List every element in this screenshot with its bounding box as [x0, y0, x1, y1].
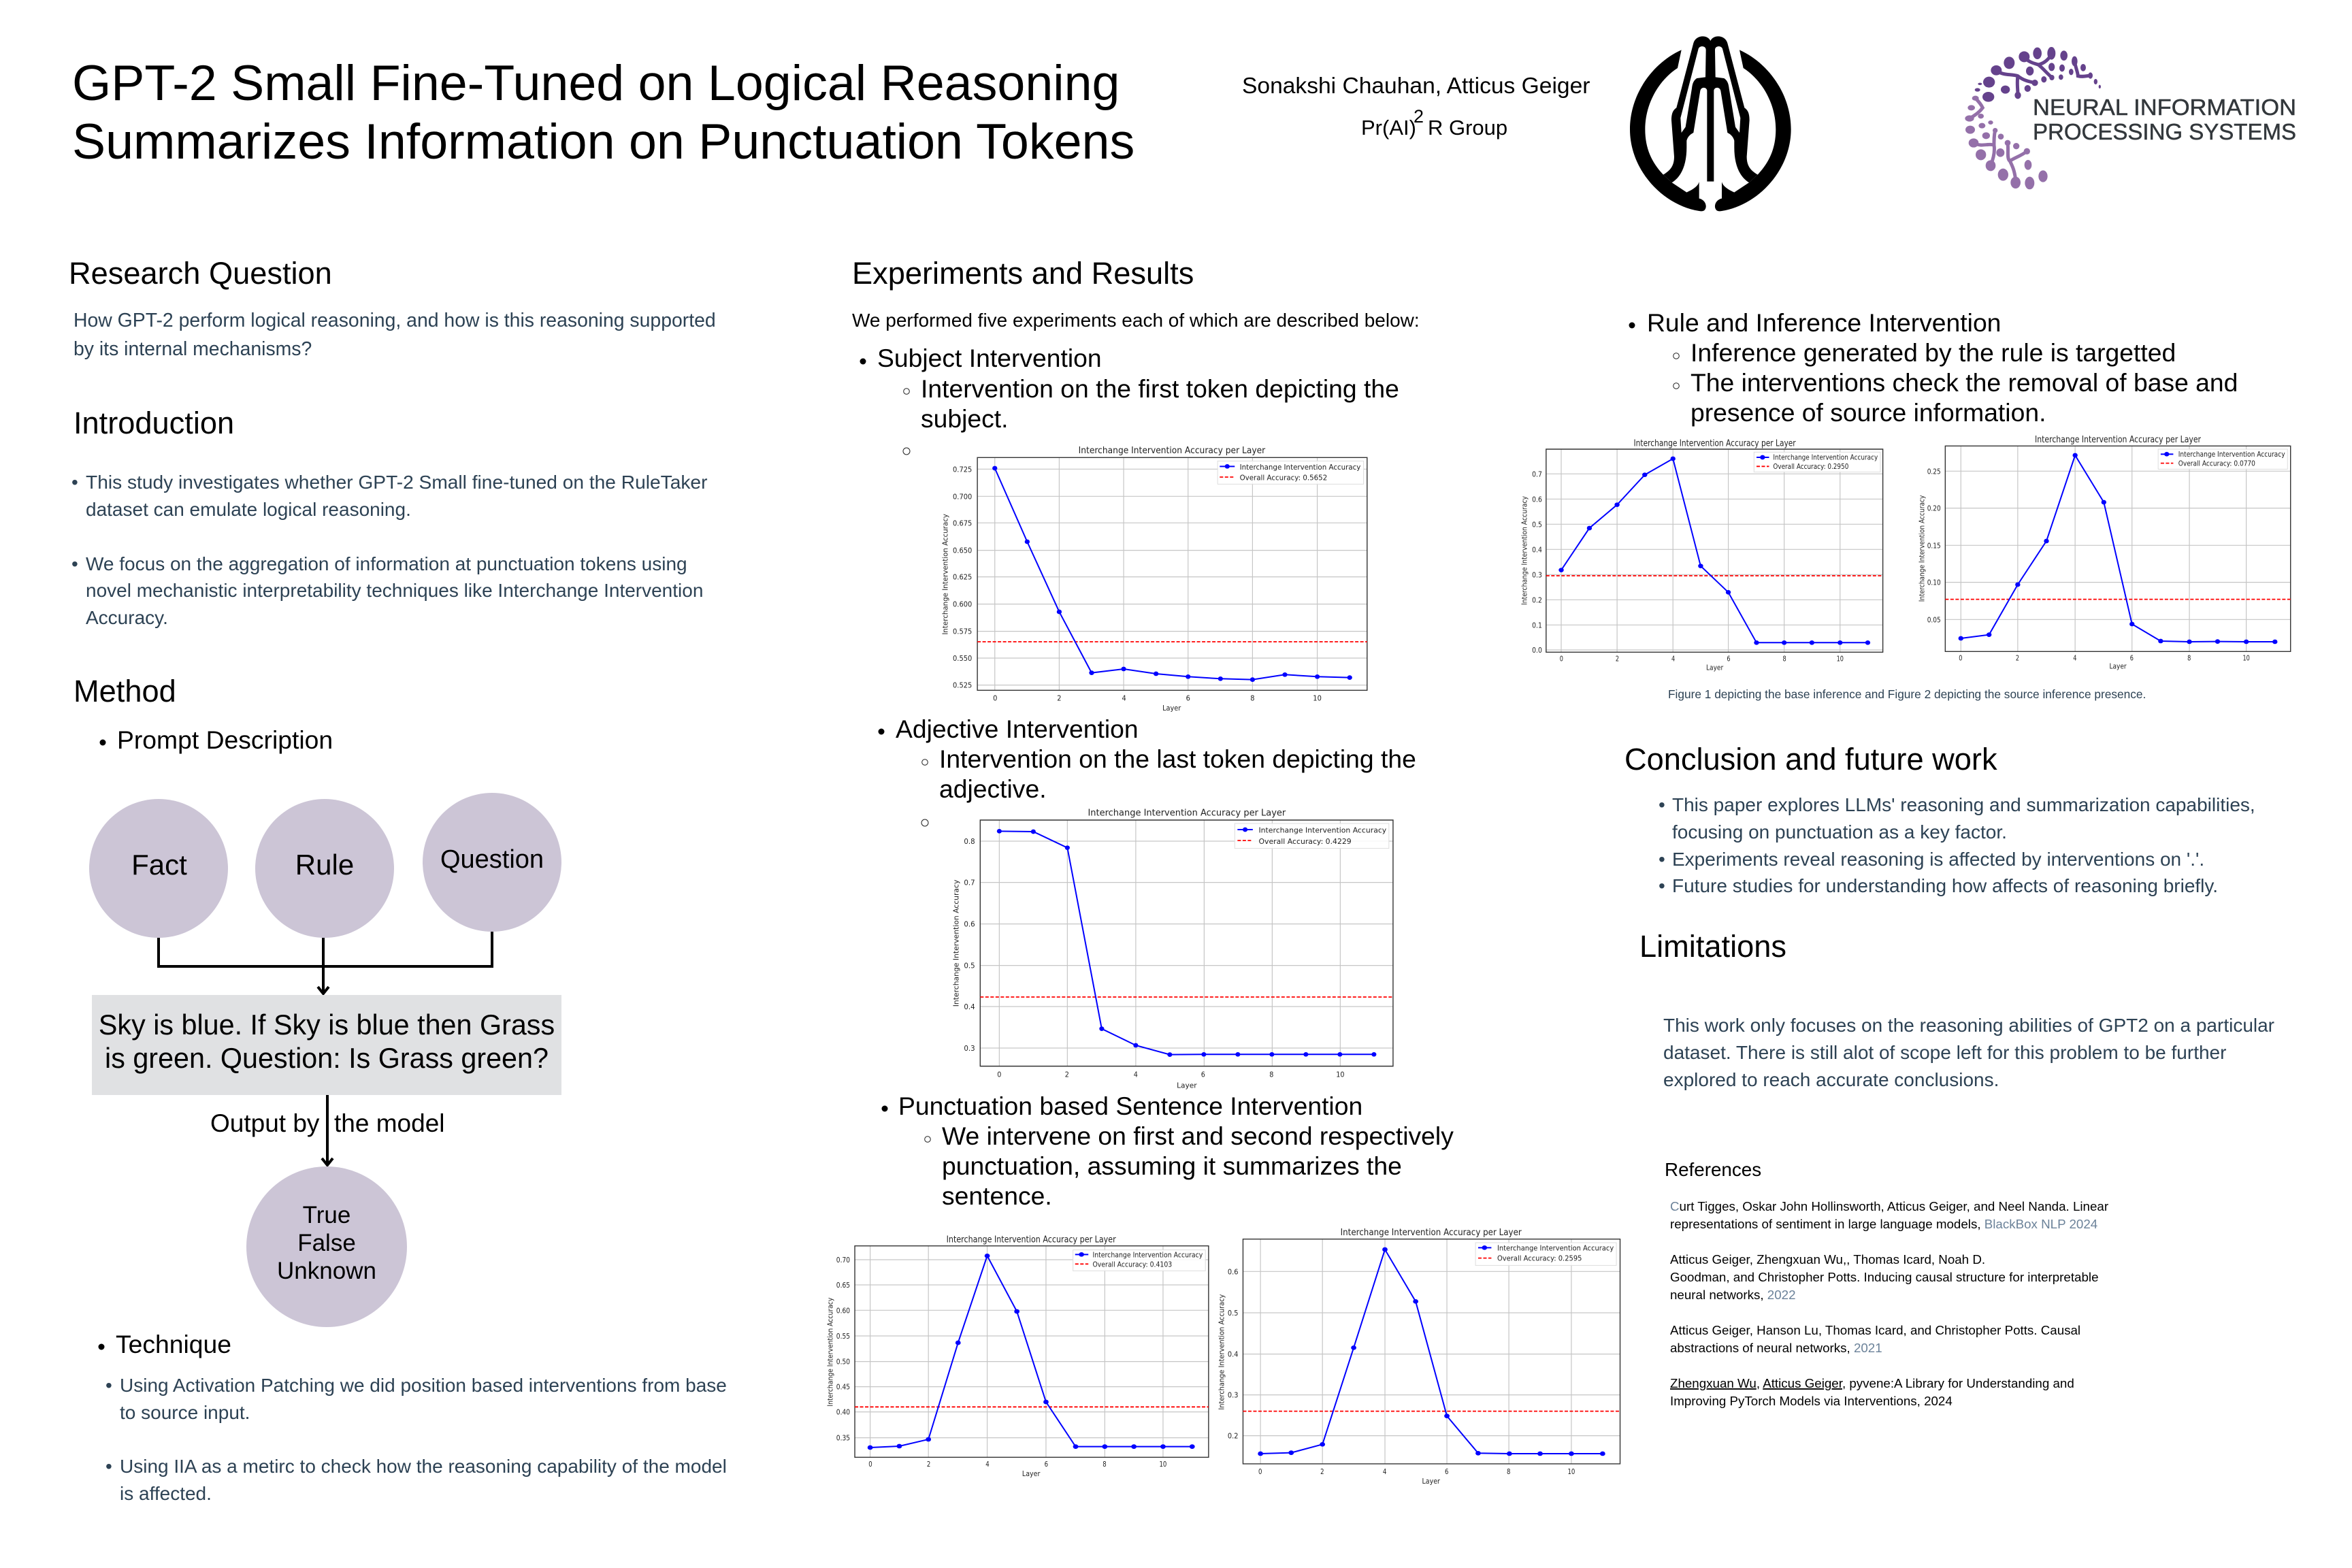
text: introduction bullets: We focus on the aggregation of information at punctuation tokens using [86, 553, 687, 574]
chart: source inference: 0.15 [1927, 541, 1941, 550]
text: conclusion bullets: Future studies for understanding how affects of reasoning briefly. [1672, 875, 2218, 896]
chart: adjective intervention: Layer [1177, 1081, 1197, 1090]
chart: source inference: 0.05 [1927, 615, 1941, 624]
text: limitations: dataset. There is still alot of scope left for this problem to be further [1663, 1042, 2226, 1063]
text: introduction bullets: • [71, 553, 78, 574]
text: reference list: neural networks, 2022 [1670, 1288, 1795, 1302]
text: reference list: Zhengxuan Wu, Atticus Geiger, pyvene:A Library for Understanding and [1670, 1376, 2074, 1390]
chart: adjective intervention: 6 [1201, 1071, 1205, 1079]
chart: source inference: 0.20 [1927, 504, 1941, 513]
chart: subject intervention: 0.575 [953, 628, 972, 636]
node: outputs [246, 1166, 407, 1327]
heading: research question: Research Question [69, 256, 332, 291]
text: technique bullets [105, 1375, 727, 1504]
text: technique bullets: to source input. [120, 1402, 250, 1423]
subheading: rule and inference intervention: presence of source information. [1690, 398, 2046, 427]
text: introduction bullets [71, 472, 707, 628]
chart: punctuation second: Interchange Intervention Accuracy per Layer [1341, 1226, 1522, 1237]
chart: punctuation second: 8 [1507, 1467, 1510, 1476]
node: outputs: True [303, 1202, 350, 1228]
diagram: prompt structure [89, 793, 561, 1327]
text: reference list: Goodman, and Christopher Potts. Inducing causal structure for interpretable [1670, 1270, 2099, 1284]
chart: punctuation second: 2 [1320, 1467, 1324, 1476]
title: GPT-2 Small Fine-Tuned on Logical Reasoning [72, 54, 1120, 111]
chart: adjective intervention: 0.8 [964, 838, 975, 846]
chart: source inference: 4 [2073, 654, 2076, 663]
text: technique bullets: Using IIA as a metirc to check how the reasoning capability of the model [120, 1456, 727, 1477]
chart: subject intervention: 0.525 [953, 682, 972, 690]
subheading: subject intervention: subject. [921, 404, 1009, 433]
chart: punctuation first: 0.35 [836, 1434, 850, 1442]
chart: source inference: 10 [2242, 654, 2250, 663]
chart: adjective intervention: 0.5 [964, 962, 975, 970]
chart: punctuation first: 0.70 [836, 1256, 850, 1264]
chart: source inference: 2 [2016, 654, 2019, 663]
subheading: punctuation intervention: We intervene on first and second respectively [942, 1122, 1454, 1150]
text: limitations [1663, 1015, 2274, 1090]
chart: base inference: 0.7 [1532, 470, 1542, 478]
chart: adjective intervention: 8 [1269, 1071, 1273, 1079]
chart: punctuation second: Overall Accuracy: 0.2595 [1497, 1254, 1582, 1262]
chart: base inference: Layer [1706, 663, 1723, 672]
chart: subject intervention: 0 [993, 694, 997, 702]
subheading: subject intervention: Subject Intervention [877, 344, 1102, 372]
node: fact [89, 799, 228, 938]
subheading: rule and inference intervention: Rule and Inference Intervention [1647, 308, 2001, 337]
chart: adjective intervention: 0.3 [964, 1045, 975, 1053]
heading: limitations: Limitations [1639, 929, 1786, 964]
chart: subject intervention: 8 [1250, 694, 1255, 702]
heading: method: Method [74, 674, 176, 708]
subheading: rule and inference intervention: Inference generated by the rule is targetted [1690, 338, 2176, 367]
chart: punctuation first: 8 [1102, 1460, 1107, 1469]
text: reference list: Atticus Geiger, Hanson Lu, Thomas Icard, and Christopher Potts. Causal [1670, 1323, 2080, 1337]
text: technique bullets: • [105, 1456, 112, 1477]
NeurIPS wordmark [2033, 95, 2296, 145]
text: introduction bullets: This study investigates whether GPT-2 Small fine-tuned on the RuleTaker [86, 472, 707, 493]
chart: punctuation second: 10 [1567, 1467, 1575, 1476]
subheading: rule and inference intervention [1629, 308, 2238, 427]
text: limitations: This work only focuses on the reasoning abilities of GPT2 on a particular [1663, 1015, 2274, 1036]
chart: punctuation first: 0.60 [836, 1306, 850, 1315]
authors: Pr(AI) [1361, 116, 1416, 140]
chart: punctuation second: 0.3 [1228, 1391, 1238, 1399]
text: Interchange Intervention Accuracy [1773, 453, 1878, 462]
text: reference list: Curt Tigges, Oskar John Hollinsworth, Atticus Geiger, and Neel Nanda. Linear [1670, 1199, 2108, 1213]
chart: punctuation first: Interchange Intervention Accuracy [826, 1298, 834, 1407]
chart: punctuation second: 0.5 [1228, 1309, 1238, 1318]
chart: subject intervention: 4 [1122, 694, 1126, 702]
chart: subject intervention: 0.675 [953, 519, 972, 527]
chart: adjective intervention: 0.4 [964, 1003, 975, 1011]
text: reference list [1670, 1199, 2108, 1408]
chart: punctuation first: 0.55 [836, 1332, 850, 1341]
chart: adjective intervention: Interchange Intervention Accuracy [953, 879, 961, 1007]
subheading: subject intervention: Intervention on the first token depicting the [921, 374, 1399, 403]
text: conclusion bullets: • [1659, 849, 1665, 870]
heading: introduction: Introduction [74, 406, 234, 440]
chart: punctuation second: 4 [1383, 1467, 1386, 1476]
chart: source inference: 0 [1959, 654, 1962, 663]
chart: source inference: Layer [2109, 662, 2127, 671]
text: experiments intro: We performed five experiments each of which are described below: [852, 310, 1420, 331]
subheading: rule and inference intervention: The interventions check the removal of base and [1690, 368, 2238, 397]
subheading: adjective intervention [878, 715, 1416, 826]
chart: adjective intervention: 0.6 [964, 920, 975, 929]
chart: subject intervention: 6 [1186, 694, 1190, 702]
chart: adjective intervention: Interchange Intervention Accuracy [1258, 826, 1386, 834]
text: conclusion bullets: This paper explores LLMs' reasoning and summarization capabilities, [1672, 794, 2255, 815]
chart: subject intervention: Layer [1162, 704, 1181, 713]
connector lines [157, 932, 493, 994]
subheading: technique: Technique [116, 1330, 231, 1358]
chart: subject intervention: 0.700 [953, 493, 972, 501]
authors [1242, 74, 1590, 140]
subheading: punctuation intervention: sentence. [942, 1181, 1052, 1210]
chart: source inference: 8 [2187, 654, 2191, 663]
chart: subject intervention: Interchange Intervention Accuracy per Layer [1079, 445, 1266, 456]
authors: Sonakshi Chauhan, Atticus Geiger [1242, 74, 1590, 99]
chart: punctuation first: 0.45 [836, 1383, 850, 1391]
caption: Figure 1 depicting the base inference and Figure 2 depicting the source inference presence. [1668, 687, 2146, 701]
prompt example box [92, 995, 561, 1095]
chart: base inference: Overall Accuracy: 0.2950 [1773, 462, 1848, 471]
node: outputs: False [297, 1230, 356, 1256]
chart: punctuation first: 4 [985, 1460, 990, 1469]
chart: source inference: 0.10 [1927, 578, 1941, 587]
chart: base inference: 0.5 [1532, 520, 1542, 529]
chart: punctuation first: 2 [927, 1460, 930, 1469]
node: fact: Fact [131, 849, 187, 881]
text: conclusion bullets: • [1659, 875, 1665, 896]
chart: adjective intervention [953, 808, 1393, 1090]
text: technique bullets: is affected. [120, 1483, 212, 1504]
title [72, 54, 1134, 169]
chart: source inference: 0.25 [1927, 467, 1941, 476]
chart: subject intervention: Interchange Intervention Accuracy [1240, 463, 1361, 472]
chart: subject intervention: Interchange Intervention Accuracy [941, 513, 950, 635]
chart: adjective intervention: 4 [1134, 1071, 1138, 1079]
chart: source inference [1918, 434, 2291, 671]
NeurIPS wordmark: PROCESSING SYSTEMS [2033, 120, 2296, 145]
icon: praying hands logo [1630, 36, 1791, 211]
text: introduction bullets: • [71, 472, 78, 493]
chart: punctuation second: 0.4 [1228, 1350, 1238, 1358]
chart: punctuation first: Overall Accuracy: 0.4103 [1092, 1260, 1172, 1269]
text: introduction bullets: Accuracy. [86, 607, 168, 628]
node: rule [255, 799, 394, 938]
subheading: punctuation intervention: Punctuation based Sentence Intervention [898, 1092, 1362, 1120]
text: limitations: explored to reach accurate conclusions. [1663, 1069, 1999, 1090]
chart: adjective intervention: 2 [1065, 1071, 1069, 1079]
heading: references: References [1665, 1159, 1761, 1180]
title: Summarizes Information on Punctuation Tokens [72, 113, 1134, 169]
chart: base inference: 0.3 [1532, 570, 1542, 579]
label: output by the model [210, 1109, 445, 1137]
chart: adjective intervention: 0.7 [964, 879, 975, 887]
text: technique bullets: • [105, 1375, 112, 1396]
chart: punctuation first: 6 [1045, 1460, 1048, 1469]
chart: punctuation second: Interchange Intervention Accuracy [1217, 1294, 1226, 1410]
NeurIPS wordmark: NEURAL INFORMATION [2033, 95, 2296, 120]
text: Interchange Intervention Accuracy [1497, 1244, 1614, 1252]
chart: punctuation first: 10 [1159, 1460, 1166, 1469]
chart: punctuation first: 0 [868, 1460, 872, 1469]
chart: base inference: 10 [1837, 655, 1844, 664]
chart: punctuation first [826, 1234, 1209, 1478]
subheading: punctuation intervention [882, 1092, 1454, 1210]
icon: NeurIPS logo dots [1965, 47, 2101, 189]
chart: base inference: 0.6 [1532, 495, 1542, 504]
chart: base inference: Interchange Intervention Accuracy per Layer [1634, 438, 1796, 448]
chart: base inference: 0.1 [1532, 621, 1542, 630]
chart: subject intervention: 2 [1057, 694, 1062, 702]
chart: subject intervention: 0.625 [953, 574, 972, 582]
chart: punctuation first: Interchange Intervention Accuracy per Layer [947, 1234, 1116, 1245]
chart: adjective intervention: 10 [1336, 1071, 1345, 1079]
chart: punctuation second: Layer [1422, 1477, 1440, 1486]
chart: punctuation second [1217, 1226, 1620, 1486]
authors: 2 [1414, 106, 1424, 127]
chart: adjective intervention: Interchange Intervention Accuracy per Layer [1088, 808, 1286, 818]
chart: punctuation first: 0.40 [836, 1408, 850, 1416]
text: introduction bullets: dataset can emulate logical reasoning. [86, 499, 411, 520]
chart: source inference: Interchange Intervention Accuracy [1918, 495, 1926, 602]
chart: punctuation second: 0 [1258, 1467, 1262, 1476]
text: conclusion bullets [1659, 794, 2255, 896]
text: research question: by its internal mechanisms? [74, 338, 312, 360]
prompt example box: Sky is blue. If Sky is blue then Grass [99, 1009, 555, 1041]
node: outputs: Unknown [277, 1258, 376, 1284]
chart: base inference: 0.2 [1532, 595, 1542, 604]
text: reference list: Atticus Geiger, Zhengxuan Wu,, Thomas Icard, Noah D. [1670, 1252, 1985, 1267]
chart: punctuation first: 0.65 [836, 1281, 850, 1290]
node: question: Question [440, 845, 544, 874]
chart: punctuation second: 6 [1445, 1467, 1448, 1476]
text: research question [74, 310, 716, 360]
chart: subject intervention: Overall Accuracy: 0.5652 [1240, 474, 1327, 483]
text: introduction bullets: novel mechanistic interpretability techniques like Interchange Intervention [86, 580, 703, 601]
chart: punctuation second: 0.2 [1228, 1432, 1238, 1440]
chart: base inference [1521, 438, 1883, 672]
chart: base inference: 2 [1616, 655, 1619, 664]
text: conclusion bullets: focusing on punctuation as a key factor. [1672, 821, 2007, 843]
chart: subject intervention: 0.600 [953, 601, 972, 609]
node: question [423, 793, 561, 932]
chart: source inference: 6 [2130, 654, 2134, 663]
label: output by the model: the model [334, 1109, 445, 1137]
chart: adjective intervention: 0 [997, 1071, 1001, 1079]
chart: base inference: 0.0 [1532, 646, 1542, 655]
chart: base inference: 0 [1560, 655, 1563, 664]
subheading: adjective intervention: Intervention on the last token depicting the [939, 745, 1416, 773]
label: output by the model: Output by [210, 1109, 320, 1137]
chart: punctuation second: 0.6 [1228, 1267, 1238, 1276]
node: rule: Rule [295, 849, 354, 881]
chart: base inference: 0.4 [1532, 545, 1542, 554]
chart: punctuation first: Layer [1022, 1469, 1041, 1478]
authors: R Group [1428, 116, 1507, 140]
chart: adjective intervention: Overall Accuracy: 0.4229 [1258, 838, 1352, 846]
arrow: output [322, 1095, 333, 1165]
chart: base inference: 4 [1671, 655, 1675, 664]
text: reference list: abstractions of neural networks, 2021 [1670, 1341, 1882, 1355]
prompt example box: is green. Question: Is Grass green? [105, 1043, 549, 1074]
subheading: adjective intervention: Adjective Intervention [896, 715, 1139, 743]
subheading: prompt description: Prompt Description [117, 725, 333, 754]
text: Interchange Intervention Accuracy [1092, 1250, 1203, 1259]
subheading: subject intervention [860, 344, 1399, 455]
text: conclusion bullets: • [1659, 794, 1665, 815]
text: conclusion bullets: Experiments reveal reasoning is affected by interventions on '.'. [1672, 849, 2204, 870]
chart: base inference: 6 [1727, 655, 1731, 664]
chart: subject intervention: 10 [1313, 694, 1322, 702]
chart: subject intervention: 0.650 [953, 547, 972, 555]
heading: experiments and results: Experiments and Results [852, 256, 1194, 291]
chart: subject intervention: 0.725 [953, 466, 972, 474]
text: technique bullets: Using Activation Patching we did position based interventions from base [120, 1375, 727, 1396]
chart: punctuation first: 0.50 [836, 1358, 850, 1366]
subheading: adjective intervention: adjective. [939, 774, 1047, 803]
subheading: punctuation intervention: punctuation, assuming it summarizes the [942, 1152, 1402, 1180]
text: reference list: representations of sentiment in large language models, BlackBox NLP 2024 [1670, 1217, 2097, 1231]
chart: base inference: 8 [1782, 655, 1786, 664]
heading: conclusion: Conclusion and future work [1624, 742, 1997, 777]
chart: subject intervention: 0.550 [953, 655, 972, 663]
text: reference list: Improving PyTorch Models via Interventions, 2024 [1670, 1394, 1953, 1408]
chart: subject intervention [941, 445, 1367, 713]
text: research question: How GPT-2 perform logical reasoning, and how is this reasoning supported [74, 310, 716, 331]
chart: base inference: Interchange Intervention Accuracy [1521, 496, 1529, 605]
